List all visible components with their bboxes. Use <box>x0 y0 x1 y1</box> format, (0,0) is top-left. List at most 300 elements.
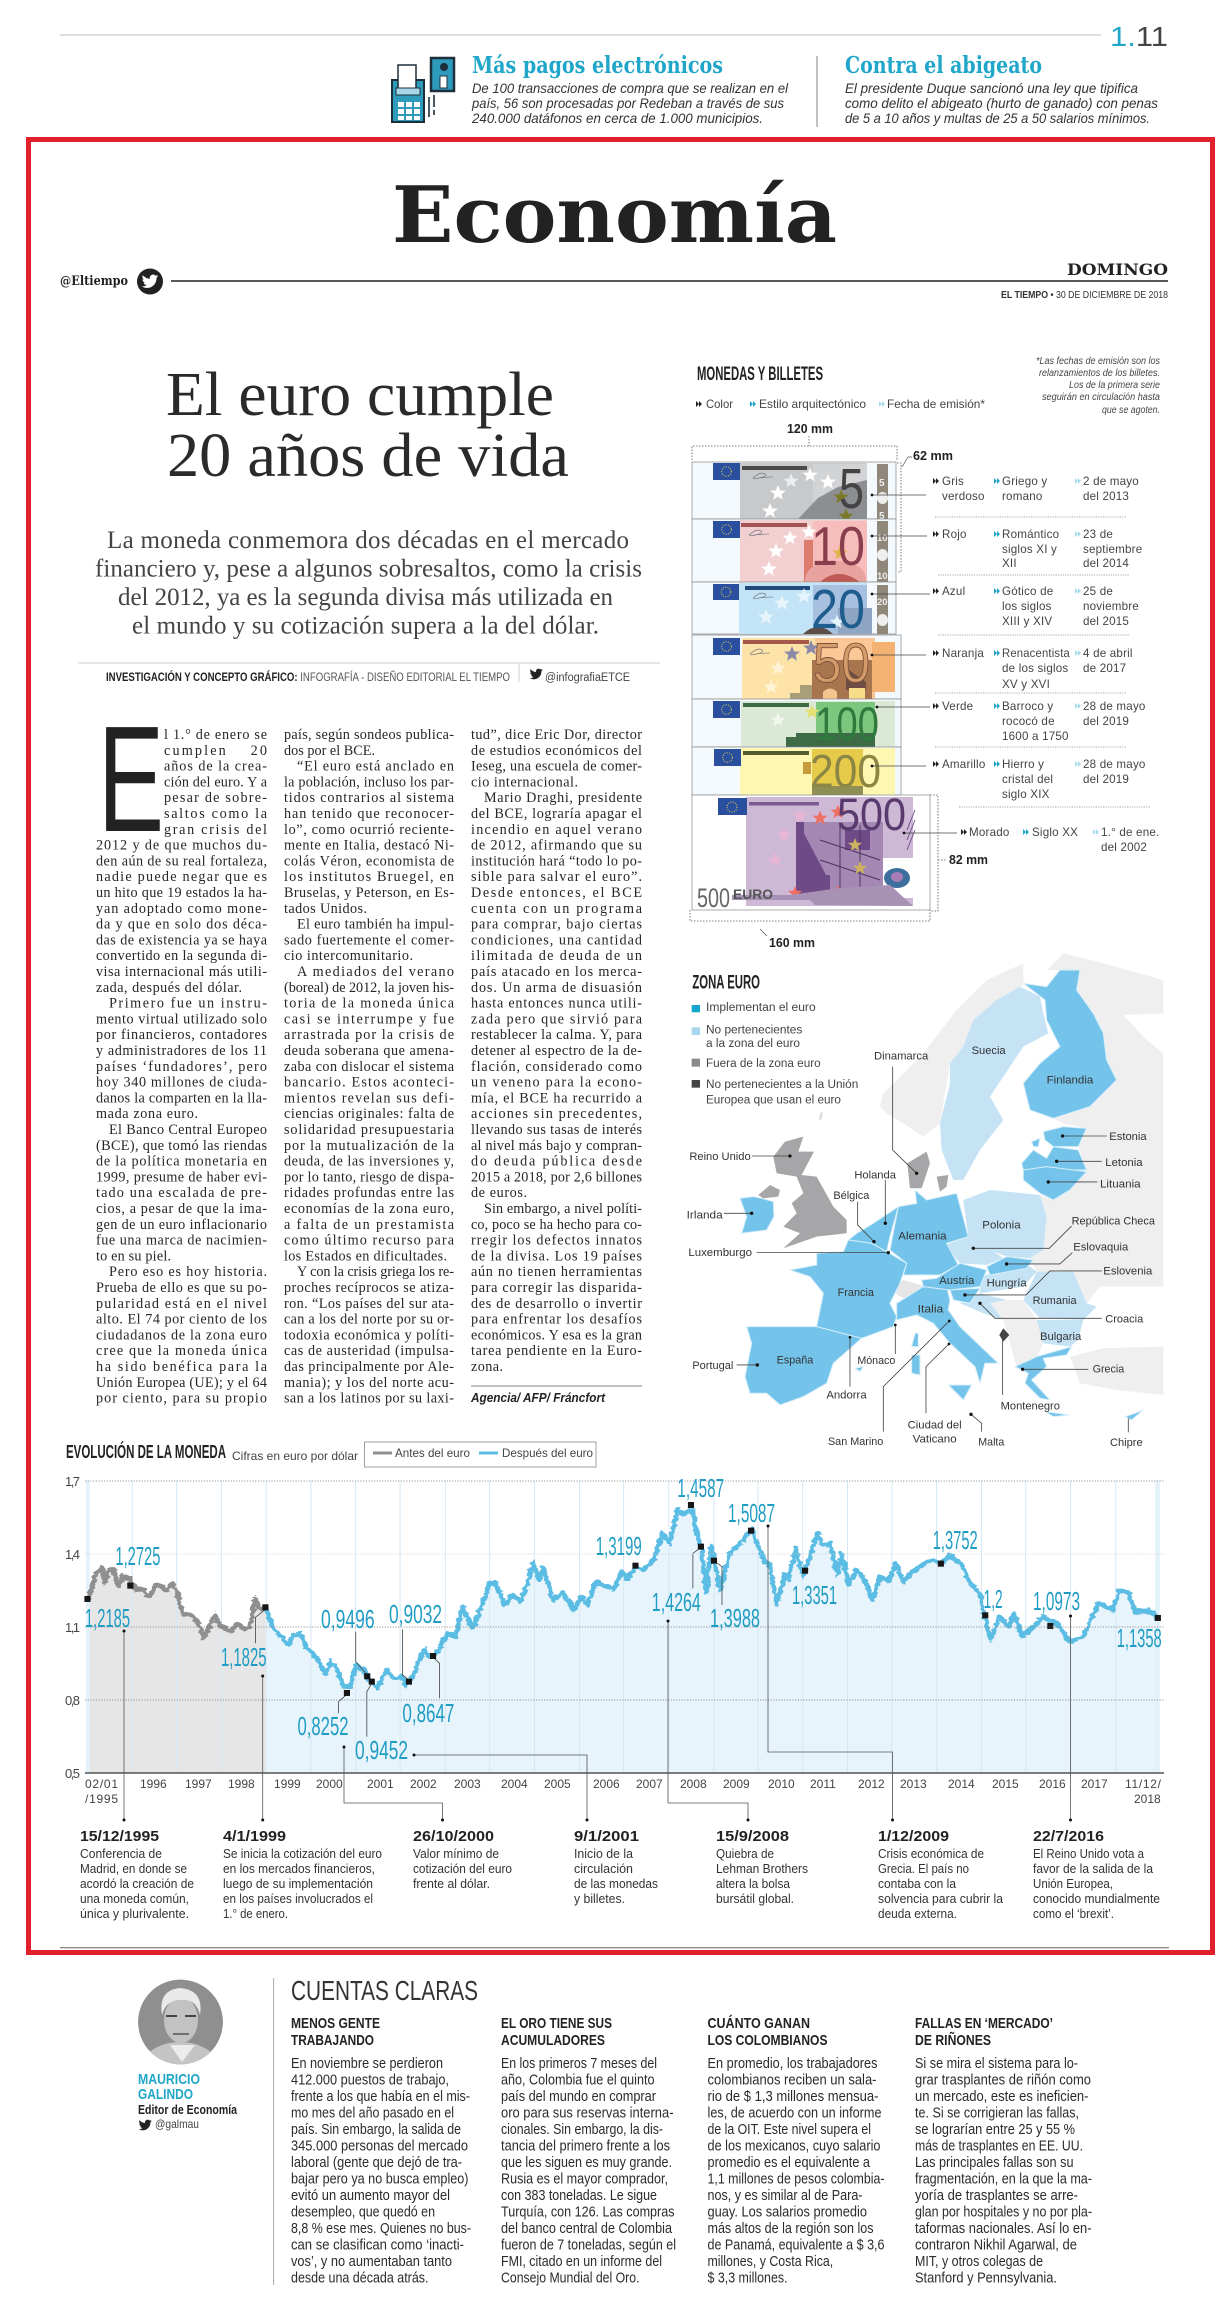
timeline event: 15/9/2008: bursátil global. <box>716 1892 794 1906</box>
column: cuánto ganan los colombianos: rio de $ 1,3 millones mensua- <box>708 2089 879 2105</box>
article column 1: tado una escalada de pre- <box>96 1185 267 1201</box>
article column 2: dos por el BCE. <box>284 743 375 759</box>
banknote table: Verde <box>942 700 973 713</box>
article column 1: l 1.° de enero se <box>164 727 267 743</box>
article column 3: un veneno para la econo- <box>471 1075 642 1091</box>
timeline event: 1/12/2009: deuda externa. <box>878 1907 957 1921</box>
banknote: 10 euros: 10 <box>877 571 888 582</box>
column: fallas en mercado de riñones: contraron Nikhil Agarwal, de <box>915 2238 1077 2254</box>
brief: Contra el abigeato: Contra el abigeato <box>845 52 1042 79</box>
chart y axis labels: 1,7 <box>65 1474 80 1489</box>
dimension: 120 mm: 120 mm <box>787 422 833 436</box>
chart x axis labels: 2015 <box>992 1777 1019 1791</box>
article column 3: para comprar, bajo ciertas <box>471 917 642 933</box>
leader lines <box>871 494 957 834</box>
article column 2: cas de austeridad (impulsa- <box>284 1343 454 1359</box>
article column 2: por la mutualización de la <box>284 1138 455 1154</box>
chart x axis labels <box>85 1777 1162 1806</box>
column: fallas en mercado de riñones: te. Si se corrigieran las fallas, <box>915 2106 1079 2122</box>
article column 3: 2015 a 2018, por 2,6 billones <box>471 1169 642 1185</box>
banknote table: rococó de <box>1002 715 1055 728</box>
chart x axis labels: 2005 <box>544 1777 571 1791</box>
brief: Más pagos electrónicos: país, 56 son procesadas por Redeban a través de sus <box>471 95 784 111</box>
article column 3: cuenta con un programa <box>471 901 643 917</box>
column: el oro tiene sus acumuladores: Consejo Mundial del Oro. <box>501 2270 640 2286</box>
chart value labels: 0,8252 <box>298 1711 348 1741</box>
article column 2: proches recíprocos se atiza- <box>284 1280 454 1296</box>
column: menos gente trabajando: En noviembre se perdieron <box>291 2056 443 2072</box>
panel: red frame <box>28 140 1212 1952</box>
brief: Contra el abigeato: de 5 a 10 años y multas de 25 a 50 salarios mínimos. <box>845 110 1150 126</box>
article column 2: deuda, de las inversiones y, <box>284 1154 454 1170</box>
banknote table: Renacentista <box>1002 647 1070 660</box>
article column 3: tarea pendiente en la Euro- <box>471 1343 642 1359</box>
map labels: Irlanda <box>687 1210 723 1222</box>
banknote: 5 euros: 5 <box>879 511 885 522</box>
banknote: 50 euros <box>692 631 901 699</box>
chart x axis labels: 2001 <box>367 1777 394 1791</box>
column: fallas en mercado de riñones: fragmentación, en la que la ma- <box>915 2172 1092 2188</box>
map labels <box>687 1045 1156 1449</box>
column: cuánto ganan los colombianos: de los mexicanos, cuyo salario <box>708 2138 880 2154</box>
banknote: 20 euros: 20 <box>811 578 865 640</box>
map labels: Malta <box>978 1437 1005 1449</box>
map labels: Reino Unido <box>689 1151 751 1163</box>
article column 2: cio intercomunitario. <box>284 948 413 964</box>
column: fallas en mercado de riñones: Stanford y Pennsylvania. <box>915 2270 1057 2286</box>
article column 2: mente en Italia, destacó Ni- <box>284 838 454 854</box>
timeline event: 15/12/1995: acordó la creación de <box>80 1877 194 1891</box>
map leader dots <box>750 1134 1064 1416</box>
chart value labels: 0,9496 <box>321 1604 375 1634</box>
banknote table: 23 de <box>1083 528 1113 541</box>
timeline event: 22/7/2016: conocido mundialmente <box>1033 1892 1160 1906</box>
banknote: 20 euros: 20 <box>877 597 888 608</box>
article column 1: fue una marca de nacimien- <box>96 1233 267 1249</box>
banknote: 50 euros: 50 <box>813 631 870 694</box>
banknote table: del 2015 <box>1083 615 1129 628</box>
article column 1: convertido en la segunda di- <box>96 948 267 964</box>
column: fallas en mercado de riñones: DE RIÑONES <box>915 2031 991 2049</box>
timeline event: 4/1/1999: en los países involucrados el <box>223 1892 373 1906</box>
article column 3: para enfrentar los desafíos <box>471 1312 642 1328</box>
column: fallas en mercado de riñones: se lograrían entre 25 y 55 % <box>915 2122 1075 2138</box>
deck: del 2012, ya es la segunda divisa más utilizada en <box>118 584 614 611</box>
banknote table: siglos XI y <box>1002 543 1057 556</box>
author handle: @galmau <box>155 2117 199 2131</box>
map legend: Europea que usan el euro <box>706 1092 841 1106</box>
chart value labels: 1,3351 <box>792 1580 837 1610</box>
column: cuánto ganan los colombianos: $ 3,3 millones. <box>708 2270 788 2286</box>
footnote: que se agoten. <box>1102 405 1160 416</box>
article column 3: aún no tienen herramientas <box>471 1264 642 1280</box>
article column 1: ciudadanos de la zona euro <box>96 1327 267 1343</box>
chart y axis labels: 1,4 <box>65 1547 80 1562</box>
map labels: Holanda <box>854 1169 897 1181</box>
column: cuánto ganan los colombianos: nos, y es similar al de Para- <box>708 2188 863 2204</box>
article column 3: para corregir las disparida- <box>471 1280 642 1296</box>
banknote table: Romántico <box>1002 528 1059 541</box>
article column 1: da y que en solo dos déca- <box>96 917 267 933</box>
column: cuánto ganan los colombianos: millones, y Costa Rica, <box>708 2254 833 2270</box>
icon: payment terminal <box>392 58 454 122</box>
chart value labels: 0,9032 <box>389 1599 442 1629</box>
article column 3: acciones sin precedentes, <box>471 1106 642 1122</box>
article column 2: los Estados en dificultades. <box>284 1248 447 1264</box>
banknote table: romano <box>1002 490 1043 503</box>
timeline event: 26/10/2000 <box>413 1828 512 1891</box>
banknote table: noviembre <box>1083 600 1139 613</box>
banknote table: XIII y XIV <box>1002 615 1052 628</box>
article column 1: 1999, presume de haber evi- <box>96 1169 267 1185</box>
column: el oro tiene sus acumuladores: En los primeros 7 meses del <box>501 2056 657 2072</box>
column: menos gente trabajando: laboral (gente que dejó de tra- <box>291 2155 462 2171</box>
dimension: 82 mm <box>930 795 988 911</box>
chart x axis labels: 2004 <box>501 1777 528 1791</box>
timeline event: 15/9/2008 <box>716 1828 808 1906</box>
article column 1: yan adoptado como mone- <box>96 901 267 917</box>
map labels: Finlandia <box>1047 1074 1094 1086</box>
banknote: 5 euros: 5 <box>839 457 864 521</box>
article column 2: “El euro está anclado en <box>297 759 454 775</box>
article column 3: Sin embargo, a nivel políti- <box>484 1201 642 1217</box>
column: cuánto ganan los colombianos <box>708 2015 885 2286</box>
map: eurozone countries <box>740 970 1143 1420</box>
map leader lines <box>724 1067 1128 1432</box>
article column 1: gen de un euro inflacionario <box>96 1217 267 1233</box>
chart lines <box>87 1508 1158 1688</box>
banknote table: verdoso <box>942 490 985 503</box>
timeline event: 1/12/2009: Crisis económica de <box>878 1847 984 1861</box>
article column 2: A mediados del verano <box>297 964 454 980</box>
chart value labels: 1,3988 <box>710 1603 760 1633</box>
author name: MAURICIO <box>138 2071 200 2088</box>
deck: el mundo y su cotización supera a la del dólar. <box>132 612 599 640</box>
area before euro <box>86 1568 266 1773</box>
map labels: Italia <box>918 1303 944 1315</box>
chart value labels: 1,2725 <box>115 1541 160 1571</box>
chart x axis labels: 2009 <box>723 1777 750 1791</box>
column: menos gente trabajando: mo mes del año pasado en el <box>291 2106 454 2122</box>
timeline event: 1/12/2009 <box>878 1828 1003 1921</box>
map: non-euro EU members <box>940 987 1097 1347</box>
chart value labels: 1,5087 <box>728 1498 775 1528</box>
column: cuánto ganan los colombianos: 1,1 millones de pesos colombia- <box>708 2172 885 2188</box>
timeline event: 15/9/2008: altera la bolsa <box>716 1877 790 1891</box>
column: menos gente trabajando: país. Sin embargo, la salida de <box>291 2122 461 2138</box>
credit line: @infografiaETCE <box>545 672 630 684</box>
drop cap: E <box>98 694 164 863</box>
chart x axis labels: 2013 <box>900 1777 927 1791</box>
article column 2: tidos contrarios al sistema <box>284 790 455 806</box>
article column 3: cio internacional. <box>471 774 578 790</box>
chart x axis labels: 2016 <box>1039 1777 1066 1791</box>
column: menos gente trabajando: can se clasifican como ‘inacti- <box>291 2238 464 2254</box>
article column 2: Bruselas, y Peterson, en Es- <box>284 885 454 901</box>
article column 2: Y con la crisis griega los re- <box>297 1264 454 1280</box>
article column 2: por lo tanto, riesgo de dispa- <box>284 1169 454 1185</box>
map labels: Andorra <box>826 1389 867 1401</box>
chart x axis labels: 2008 <box>680 1777 707 1791</box>
banknote: 10 euros <box>692 515 896 582</box>
article column 3: tud”, dice Eric Dor, director <box>471 727 642 743</box>
banknote table: del 2019 <box>1083 773 1129 786</box>
map labels: Polonia <box>982 1219 1021 1231</box>
column: el oro tiene sus acumuladores: Turquía, con 126. Las compras <box>501 2204 674 2220</box>
article column 1: cios, a pesar de que la ima- <box>96 1201 267 1217</box>
timeline event: 22/7/2016: como el ‘brexit’. <box>1033 1907 1114 1921</box>
banknote table: de 2017 <box>1083 662 1126 675</box>
chart value labels: 1,1825 <box>221 1642 266 1672</box>
article column 3: ilimitada de deuda de un <box>471 948 642 964</box>
column: menos gente trabajando: 345.000 personas del mercado <box>291 2138 468 2154</box>
chart value labels <box>85 1473 1162 1765</box>
article column 2: tados Unidos. <box>284 901 367 917</box>
chart legend: Antes del euro <box>395 1446 470 1460</box>
chart x axis labels: 1997 <box>185 1777 212 1791</box>
article byline: Agencia/ AFP/ Fráncfort <box>470 1391 606 1405</box>
timeline connectors <box>124 1526 1070 1820</box>
article column 3: llevando sus tasas de interés <box>471 1122 642 1138</box>
article column 1: das de existencia ya se haya <box>96 932 268 948</box>
article column 2: (boreal) de 2012, la joven his- <box>284 980 454 996</box>
timeline event: 9/1/2001: circulación <box>574 1862 633 1876</box>
panel: evolución de la moneda <box>65 1441 1164 1921</box>
article column 1: danos la comparten en la lla- <box>96 1090 267 1106</box>
map labels: Austria <box>939 1275 975 1287</box>
banknote table: Gris <box>942 475 964 488</box>
timeline event: 9/1/2001 <box>574 1828 658 1906</box>
page number bar: 1.11 <box>1110 21 1168 52</box>
article column 3: al nivel más bajo y compran- <box>471 1138 642 1154</box>
article column 3: zona. <box>471 1359 503 1375</box>
separators <box>935 517 1151 807</box>
map labels: Luxemburgo <box>688 1247 752 1259</box>
article column 2: san a los latinos por su laxi- <box>284 1391 454 1407</box>
chart x axis labels: 2002 <box>410 1777 437 1791</box>
map labels: España <box>777 1354 814 1366</box>
chart y axis labels: 1,1 <box>65 1620 80 1635</box>
chart x axis labels: 2000 <box>316 1777 343 1791</box>
heading: monedas y billetes: MONEDAS Y BILLETES <box>697 364 823 385</box>
column: menos gente trabajando: vos’, y no aumentaban tanto <box>291 2254 452 2270</box>
column: el oro tiene sus acumuladores: del banco central de Colombia <box>501 2221 673 2237</box>
article column 3: do deuda pública desde <box>471 1154 642 1170</box>
timeline event: 15/12/1995: una moneda común, <box>80 1892 189 1906</box>
article column 1: saltos como la <box>164 806 268 822</box>
footnote: *Las fechas de emisión son los <box>1036 356 1160 367</box>
banknote: 200 euros <box>692 745 901 797</box>
article column 1: por ciento, para su propio <box>96 1391 267 1407</box>
article column 1: zada, después del dólar. <box>96 980 242 996</box>
article column 1: ha sido benéfica para la <box>96 1359 268 1375</box>
chart y axis labels <box>65 1474 80 1781</box>
map labels: Mónaco <box>857 1355 895 1367</box>
article column 1 <box>96 727 268 1407</box>
banknote table: del 2019 <box>1083 715 1129 728</box>
column: menos gente trabajando: MENOS GENTE <box>291 2015 380 2032</box>
column: menos gente trabajando: desde una década atrás. <box>291 2270 428 2286</box>
banknote: 500 euros <box>692 789 930 913</box>
column: el oro tiene sus acumuladores: FMI, citado en un informe del <box>501 2254 662 2270</box>
article column 3: dos. Un arma de disuasión <box>471 980 642 996</box>
timeline event: 26/10/2000: Valor mínimo de <box>413 1847 499 1861</box>
article column 1: hoy 340 millones de ciuda- <box>96 1075 267 1091</box>
article column 1: cumplen 20 <box>164 743 267 759</box>
brief: Contra el abigeato: como delito el abigeato (hurto de ganado) con penas <box>845 95 1158 111</box>
article column 3: de 2012, afirmando que su <box>471 838 642 854</box>
timeline event: 15/9/2008: Quiebra de <box>716 1847 774 1861</box>
map labels: Suecia <box>972 1045 1006 1057</box>
column: menos gente trabajando: bajar pero ya no busca empleo) <box>291 2172 468 2188</box>
brief: Contra el abigeato <box>845 52 1158 126</box>
column: el oro tiene sus acumuladores: ACUMULADORES <box>501 2032 605 2049</box>
article column 2: como último recurso para <box>284 1233 455 1249</box>
column: cuánto ganan los colombianos: promedio es el equivalente a <box>708 2155 871 2171</box>
timeline event: 22/7/2016: El Reino Unido vota a <box>1033 1847 1144 1861</box>
map legend: No pertenecientes <box>706 1023 802 1037</box>
banknote: 20 euros <box>692 578 896 640</box>
map: Montenegro <box>999 1328 1009 1342</box>
timeline event: 1/12/2009: 1/12/2009 <box>878 1828 949 1845</box>
column: menos gente trabajando: TRABAJANDO <box>291 2032 374 2049</box>
map labels: Montenegro <box>1001 1400 1060 1412</box>
chart y axis labels: 0,5 <box>65 1766 80 1781</box>
map labels: San Marino <box>828 1436 883 1448</box>
section header strip <box>60 260 1168 301</box>
article column 2: bancario. Estos aconteci- <box>284 1075 454 1091</box>
article column 2: economías de la zona euro, <box>284 1201 454 1217</box>
chart x axis labels: 2011 <box>810 1777 836 1791</box>
article column 2: lo”, como ocurrió reciente- <box>284 822 454 838</box>
article column 3: de estudios económicos del <box>471 743 642 759</box>
timeline event: 9/1/2001: de las monedas <box>574 1877 658 1891</box>
section header strip: EL TIEMPO • 30 DE DICIEMBRE DE 2018 <box>1001 289 1168 301</box>
column: cuánto ganan los colombianos: les, de acuerdo con un informe <box>708 2106 882 2122</box>
map labels: Estonia <box>1109 1131 1147 1143</box>
chart x axis labels: 2014 <box>948 1777 975 1791</box>
map labels: Vaticano <box>913 1434 957 1446</box>
banknote table: 4 de abril <box>1083 647 1133 660</box>
article column 2: ron. “Los países del sur ata- <box>284 1296 454 1312</box>
headline: 20 años de vida <box>167 422 569 490</box>
timeline event: 15/12/1995: Conferencia de <box>80 1847 162 1861</box>
map legend: No pertenecientes a la Unión <box>706 1077 858 1091</box>
article column 2: a falta de un prestamista <box>284 1217 455 1233</box>
chart x axis labels: 02/01 <box>85 1777 118 1791</box>
article column 2: solidaridad presupuestaria <box>284 1122 455 1138</box>
article column 1: alto. El 74 por ciento de los <box>96 1312 267 1328</box>
chart x axis labels: /1995 <box>85 1792 118 1806</box>
article column 3 <box>471 727 643 1375</box>
chart x axis labels: 2006 <box>593 1777 620 1791</box>
column: cuánto ganan los colombianos: LOS COLOMBIANOS <box>708 2032 828 2049</box>
dimension: 160 mm <box>690 910 930 950</box>
map labels: Bulgaria <box>1040 1331 1082 1343</box>
timeline event: 22/7/2016 <box>1033 1828 1160 1921</box>
column: cuánto ganan los colombianos: de Panamá, equivalente a $ 3,6 <box>708 2238 884 2254</box>
map labels: Letonia <box>1105 1157 1143 1169</box>
chart value labels: 1,3199 <box>596 1531 642 1561</box>
map labels: Chipre <box>1110 1437 1143 1449</box>
banknote table: septiembre <box>1083 543 1142 556</box>
article column 3: hasta entonces nunca utili- <box>471 996 642 1012</box>
banknote: 200 euros: 200 <box>810 745 881 797</box>
column: fallas en mercado de riñones: glan por hospitales y no por pla- <box>915 2204 1092 2220</box>
banknote table: Naranja <box>942 647 984 660</box>
column: fallas en mercado de riñones: grar trasplantes de riñón como <box>915 2072 1091 2088</box>
author role: Editor de Economía <box>138 2102 238 2117</box>
column: cuánto ganan los colombianos: de la OIT. Este nivel supera el <box>708 2122 871 2138</box>
map labels: Lituania <box>1100 1178 1141 1190</box>
article column 2: han tenido que reconocer- <box>284 806 454 822</box>
article column 2: toria de la moneda única <box>284 996 455 1012</box>
article column 2: El euro también ha impul- <box>297 917 454 933</box>
column: fallas en mercado de riñones: yoría de trasplantes se arre- <box>915 2188 1078 2204</box>
article column 1: to en su piel. <box>96 1248 171 1264</box>
banknote table: 25 de <box>1083 585 1113 598</box>
data point markers <box>84 1502 1161 1696</box>
article column 2: zaba con dislocar el sistema <box>284 1059 455 1075</box>
column: fallas en mercado de riñones: FALLAS EN ‘MERCADO’ <box>915 2015 1053 2032</box>
heading: cuentas claras: CUENTAS CLARAS <box>291 1975 478 2006</box>
banknote table: siglo XIX <box>1002 788 1050 801</box>
timeline event: 22/7/2016: Unión Europea, <box>1033 1877 1113 1891</box>
banknote: 10 euros: 10 <box>877 533 888 544</box>
banknote table: del 2014 <box>1083 557 1129 570</box>
banknote table: 28 de mayo <box>1083 700 1146 713</box>
panel: zona euro map <box>687 953 1163 1449</box>
chart x axis labels: 2010 <box>768 1777 795 1791</box>
article column 1: El Banco Central Europeo <box>109 1122 267 1138</box>
column: menos gente trabajando: desempleo, que quedó en <box>291 2204 435 2220</box>
map legend: Fuera de la zona euro <box>706 1056 821 1070</box>
chart x axis labels: 1999 <box>274 1777 301 1791</box>
timeline event: 22/7/2016: 22/7/2016 <box>1033 1828 1104 1845</box>
timeline event: 9/1/2001: y billetes. <box>574 1892 625 1906</box>
chart x axis labels: 2012 <box>858 1777 885 1791</box>
column: el oro tiene sus acumuladores: que les siguen es muy grande. <box>501 2155 672 2171</box>
banknote: 500 euros: 500 <box>697 883 730 913</box>
timeline connector dots <box>122 1524 1072 1822</box>
article column 2: los institutos Bruegel, en <box>284 869 454 885</box>
map labels: República Checa <box>1072 1215 1156 1227</box>
map legend <box>692 1000 858 1106</box>
column: el oro tiene sus acumuladores: con 383 toneladas. Le sigue <box>501 2188 657 2204</box>
timeline event: 15/12/1995: única y plurivalente. <box>80 1907 189 1921</box>
timeline event: 15/12/1995: Madrid, en donde se <box>80 1862 187 1876</box>
article column 3: institución hará “todo lo po- <box>471 853 642 869</box>
headline: El euro cumple <box>166 361 554 429</box>
banknote table: XII <box>1002 557 1017 570</box>
column: el oro tiene sus acumuladores: oro para sus reservas interna- <box>501 2106 674 2122</box>
article column 1: gran crisis del <box>164 822 267 838</box>
footnote <box>1036 356 1160 416</box>
chart value labels: 1,3752 <box>933 1525 978 1555</box>
timeline event: 4/1/1999: 4/1/1999 <box>223 1828 286 1845</box>
chart value labels: 0,9452 <box>355 1735 408 1765</box>
article column 1: Primero fue un instru- <box>109 996 267 1012</box>
brief: Más pagos electrónicos: 240.000 datáfonos en cerca de 1.000 municipios. <box>471 110 763 126</box>
section header strip: DOMINGO <box>1067 260 1168 279</box>
chart x axis labels: 1996 <box>140 1777 167 1791</box>
column: el oro tiene sus acumuladores: año, Colombia fue el quinto <box>501 2072 654 2088</box>
map labels: Francia <box>838 1287 875 1299</box>
article column 2 <box>284 727 455 1407</box>
legend: Fecha de emisión* <box>887 398 985 411</box>
banknote table: 2 de mayo <box>1083 475 1139 488</box>
column: el oro tiene sus acumuladores: EL ORO TIENE SUS <box>501 2015 612 2032</box>
